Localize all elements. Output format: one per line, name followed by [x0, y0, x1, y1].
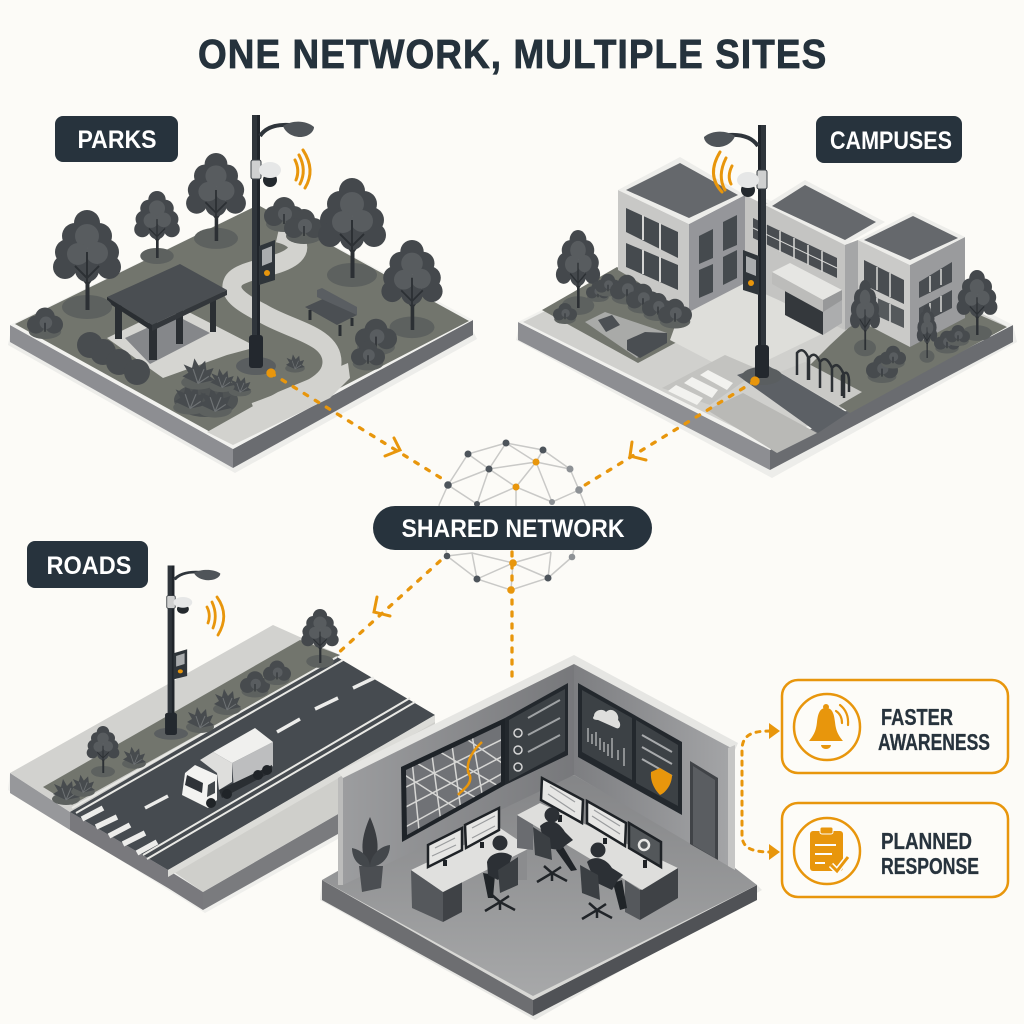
- label: parks: PARKS: [78, 126, 156, 154]
- signal arcs: [207, 597, 224, 635]
- campus trees and hedges: [553, 230, 997, 383]
- panel: roads diorama: [8, 565, 435, 913]
- operators: [483, 808, 627, 919]
- seating area: [598, 315, 667, 358]
- dashed connectors: [268, 370, 758, 680]
- callout: faster awareness: AWARENESS: [878, 729, 990, 755]
- panel: parks diorama: [8, 115, 477, 473]
- outcome connectors: [742, 723, 780, 860]
- callout: faster awareness: [782, 680, 1008, 773]
- label: campuses: CAMPUSES: [830, 127, 952, 155]
- dashed centre line: [145, 678, 374, 808]
- callout: planned response: [782, 803, 1008, 897]
- icon: clipboard: [794, 818, 860, 884]
- truck: [182, 728, 273, 808]
- label: shared network: SHARED NETWORK: [402, 515, 624, 543]
- campus platform: [516, 198, 1017, 478]
- label: parks: [55, 116, 178, 162]
- potted plant: [352, 817, 390, 892]
- lamp pole: [704, 125, 782, 385]
- right desk: [517, 803, 678, 920]
- building 2: [745, 180, 885, 330]
- icon: bell: [794, 694, 860, 760]
- pavilion slab: [107, 305, 257, 378]
- callout: planned response: RESPONSE: [881, 853, 979, 879]
- bushes: [77, 332, 150, 385]
- map screen: [400, 718, 505, 842]
- pavilion: [107, 264, 227, 364]
- lamp pole: [236, 115, 314, 375]
- roadside plants: [52, 609, 339, 805]
- shared network globe: [439, 440, 585, 594]
- building 3: [858, 212, 965, 347]
- winding path: [232, 233, 332, 412]
- label: roads: ROADS: [46, 552, 132, 580]
- room platform: [320, 775, 762, 1020]
- door: [690, 761, 718, 860]
- panel: control room diorama: [320, 655, 762, 1020]
- label: shared network: [373, 506, 652, 550]
- parks platform: [8, 205, 477, 473]
- left desk: [411, 828, 530, 922]
- lamp pole: [154, 565, 220, 740]
- panel: campuses diorama: [516, 125, 1017, 478]
- building 1: [618, 157, 745, 312]
- trees: [27, 153, 443, 370]
- road platform: [8, 625, 435, 913]
- bike racks: [797, 350, 849, 398]
- entrance porch: [772, 263, 842, 335]
- label: roads: [27, 541, 148, 588]
- callout: planned response: PLANNED: [881, 828, 972, 854]
- callout: faster awareness: FASTER: [881, 704, 953, 730]
- info panel: [505, 683, 568, 785]
- walls: [338, 655, 738, 885]
- lane markings: [72, 657, 415, 859]
- title: ONE NETWORK, MULTIPLE SITES: [198, 32, 826, 77]
- label: campuses: [816, 116, 962, 163]
- crosswalk: [82, 808, 157, 853]
- plants: [173, 354, 305, 418]
- bench: [305, 288, 357, 336]
- signal arcs: [295, 150, 310, 188]
- signal arcs: [713, 152, 732, 192]
- monitors: [428, 778, 661, 868]
- dashboard screen: [578, 683, 682, 815]
